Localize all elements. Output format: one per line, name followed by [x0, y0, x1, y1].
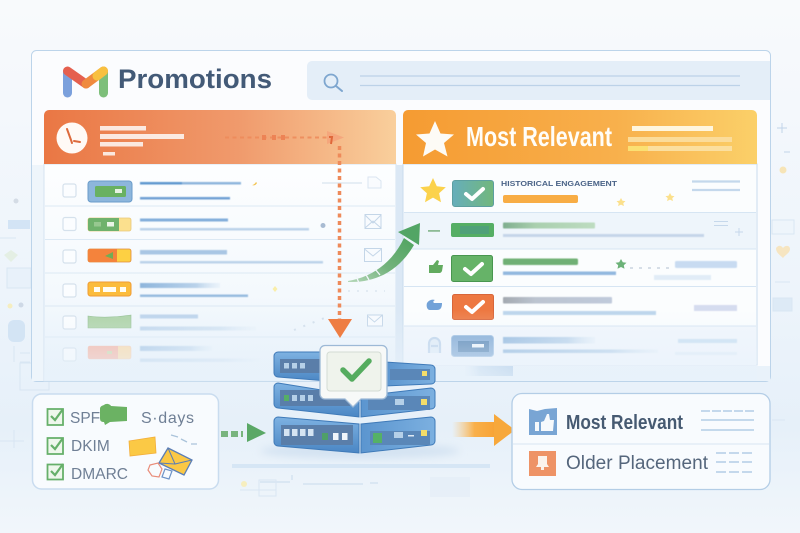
row 3 check label: [452, 256, 492, 282]
middle server tier: [274, 383, 435, 417]
row dividers: [404, 212, 756, 326]
soft band under server: [232, 464, 490, 468]
DMARC row: [48, 464, 128, 483]
row 4 check label: [452, 294, 494, 320]
left panel header: [44, 110, 396, 164]
panel: right most relevant list: [403, 110, 757, 376]
header text bars: [100, 126, 184, 156]
DMARC row: DMARC: [71, 466, 128, 483]
row stars and dots: [616, 193, 674, 269]
main window panel: [32, 50, 770, 382]
card background: [32, 394, 218, 489]
icon: small tiles: [148, 463, 172, 479]
faded band at bottom: [465, 366, 513, 376]
envelope icons: [364, 177, 382, 326]
icon: yellow star: [420, 178, 446, 202]
right row bars: [503, 222, 737, 355]
right panel header: [403, 110, 757, 164]
icon: green tag: [100, 404, 127, 425]
left panel body: [44, 164, 396, 381]
dashed arrow: header horizontal: [225, 131, 344, 144]
row 3: orange label: [88, 249, 131, 262]
panel: result card: [512, 394, 770, 490]
lower row tint: [404, 326, 756, 365]
SPF row: [48, 409, 100, 427]
icon: clock: [56, 122, 88, 154]
curved green arrow: [348, 223, 420, 283]
row 5: pale green label: [88, 315, 131, 328]
icon: thumbs up: [529, 408, 557, 435]
checkboxes: [63, 184, 76, 361]
row dividers: [45, 206, 395, 337]
server stack: [260, 352, 460, 459]
search bar: [307, 61, 770, 100]
gmail logo: [68, 71, 104, 93]
row 4: yellow label: [88, 282, 131, 296]
server shadow: [260, 443, 460, 459]
arrow: auth to server: [221, 423, 266, 442]
row 5 arch icon: [429, 338, 440, 353]
title: Promotions: Promotions: [118, 64, 272, 94]
row 2 label: [451, 223, 494, 237]
bottom window strip: [44, 366, 770, 381]
row 5 blue label: [452, 336, 494, 356]
row 2 small decorations: [714, 222, 743, 236]
small dots: [252, 182, 385, 330]
row 2: green label: [88, 218, 131, 231]
lower window fog: [44, 310, 757, 381]
right lines: [701, 411, 754, 472]
row 2 dash: [428, 230, 440, 232]
check label: teal: [452, 180, 494, 206]
heading: Most Relevant: Most Relevant: [466, 121, 612, 152]
header decorative bars: [628, 126, 732, 151]
icon: envelope: [159, 448, 192, 475]
dashed arrow: down to server: [328, 146, 352, 338]
row 4 blue icon: [427, 300, 442, 310]
row 1: blue label: [88, 181, 132, 202]
background decorations: [0, 123, 794, 497]
DKIM row: [48, 438, 110, 455]
panel: left promotions list: [44, 110, 396, 381]
label: historical engagement: HISTORICAL ENGAGEMENT: [501, 181, 618, 188]
bottom server tier: [274, 417, 435, 453]
icon: yellow folder: [129, 437, 156, 456]
icon: bell tile: [529, 451, 556, 476]
result card background: [512, 394, 770, 490]
row 3 thumb icon: [429, 260, 443, 273]
label: Older Placement: Older Placement: [566, 453, 709, 474]
row 2 tint: [404, 212, 756, 249]
DKIM row: DKIM: [71, 438, 110, 455]
label: Most Relevant: Most Relevant: [566, 412, 683, 434]
orange bar: [503, 195, 578, 203]
row 1 right lines: [692, 182, 740, 190]
panel: authentication card: [32, 394, 218, 489]
arrow: server to result: [452, 414, 515, 446]
divider: [513, 443, 769, 445]
row text lines: [140, 182, 323, 362]
top server tier: [274, 352, 435, 386]
left gutter tint: [32, 165, 44, 381]
row 6: pink label: [88, 346, 131, 359]
callout: check verified: [320, 346, 387, 407]
right panel body: [403, 164, 757, 365]
gutter between panels: [396, 165, 403, 366]
small dashes: [171, 435, 197, 444]
SPF row: SPF: [70, 410, 100, 427]
label: S-days: S·days: [141, 410, 194, 427]
icon: white star: [416, 121, 454, 156]
